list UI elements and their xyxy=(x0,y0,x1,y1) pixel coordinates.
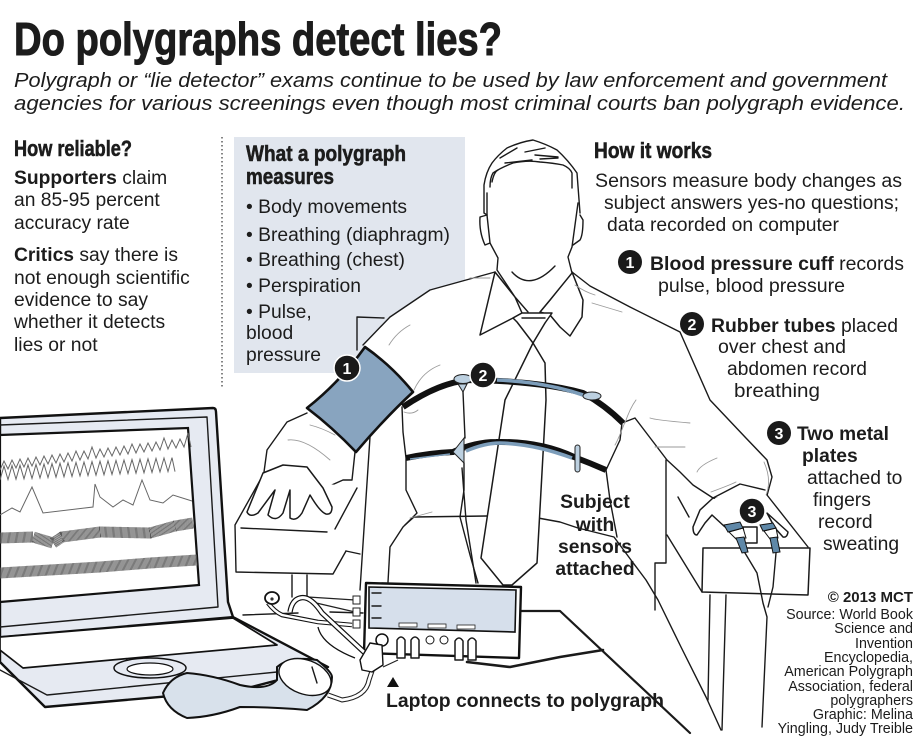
polygraph device xyxy=(364,583,521,660)
left hand and armrest xyxy=(235,465,360,597)
right arm rest and hand xyxy=(655,460,810,730)
credits and source: Graphic: Melina xyxy=(813,707,913,723)
intro text: Polygraph or “lie detector” exams continue to be used by law enforcement and government xyxy=(14,69,888,92)
rubber tube sensors xyxy=(403,374,623,583)
collar xyxy=(480,272,522,335)
credits and source xyxy=(778,589,914,737)
panel: what a polygraph measures: • Pulse, xyxy=(246,302,312,323)
laptop screen xyxy=(0,428,199,602)
marker 3: 3 xyxy=(748,504,757,521)
person illustration xyxy=(363,140,772,730)
panel: how reliable: lies or not xyxy=(14,335,98,356)
label: subject with sensors attached: attached xyxy=(555,559,635,580)
marker 3 xyxy=(739,498,765,524)
credits and source: Source: World Book xyxy=(786,607,914,623)
shirt torso and arms xyxy=(363,272,771,600)
blood pressure tubes xyxy=(265,592,398,700)
label: subject with sensors attached: sensors xyxy=(558,537,632,558)
credits and source: Science and xyxy=(834,621,913,637)
panel: how reliable: accuracy rate xyxy=(14,213,130,234)
trackpad area xyxy=(0,618,277,668)
step 3: plates xyxy=(802,446,858,467)
panel: how reliable xyxy=(13,136,190,356)
step 2: 2 xyxy=(688,317,697,334)
marker 2 xyxy=(470,362,496,388)
step 2 xyxy=(680,312,898,402)
credits and source: © 2013 MCT xyxy=(828,589,913,606)
step 1: Blood pressure cuff records xyxy=(650,254,904,275)
panel: how reliable: an 85-95 percent xyxy=(14,190,160,211)
panel: how it works: subject answers yes-no questions; xyxy=(604,193,899,214)
credits and source: Association, federal xyxy=(788,679,913,695)
marker 2: 2 xyxy=(479,368,488,385)
blood pressure cuff xyxy=(263,347,413,488)
panel: how reliable: How reliable? xyxy=(14,136,132,161)
credits and source: Yingling, Judy Treible xyxy=(778,721,913,737)
step 3: attached to xyxy=(807,468,902,489)
panel: how it works: data recorded on computer xyxy=(607,215,840,236)
chart: polygraph traces on screen xyxy=(0,433,197,573)
step 3: record xyxy=(818,512,873,533)
laptop xyxy=(0,408,328,707)
intro text xyxy=(14,69,905,115)
tie xyxy=(481,343,546,585)
panel: what a polygraph measures: blood xyxy=(246,323,293,344)
credits and source: Invention xyxy=(855,636,913,652)
credits and source: American Polygraph xyxy=(784,664,913,680)
step 2: over chest and xyxy=(718,337,846,358)
panel: what a polygraph measures: • Breathing (chest) xyxy=(246,250,405,271)
chair back left xyxy=(357,317,384,590)
label: laptop connects to polygraph xyxy=(386,677,664,712)
step 1 xyxy=(618,250,904,297)
panel: how it works: How it works xyxy=(594,138,712,163)
title: Do polygraphs detect lies? xyxy=(14,13,502,65)
step 1: 1 xyxy=(626,255,635,272)
step 3: Two metal xyxy=(797,424,889,445)
label: subject with sensors attached xyxy=(555,492,635,580)
step 2: Rubber tubes placed xyxy=(711,316,898,337)
step 2: breathing xyxy=(734,381,820,402)
marker 1: 1 xyxy=(343,361,352,378)
step 3 xyxy=(767,421,902,555)
step 3: 3 xyxy=(775,426,784,443)
step 3: sweating xyxy=(823,534,899,555)
panel: what a polygraph measures: • Perspiration xyxy=(246,276,361,297)
label: subject with sensors attached: with xyxy=(575,515,614,536)
panel: how reliable: not enough scientific xyxy=(14,268,190,289)
step 2: abdomen record xyxy=(727,359,867,380)
panel: how it works: Sensors measure body changes as xyxy=(595,171,902,192)
panel: what a polygraph measures: • Body movements xyxy=(246,197,407,218)
panel: what a polygraph measures: pressure xyxy=(246,345,321,366)
pressure bulb xyxy=(163,652,336,718)
panel: how reliable: Supporters claim xyxy=(14,168,167,189)
marker 1 xyxy=(334,355,360,381)
step 3: fingers xyxy=(813,490,871,511)
shirt creases xyxy=(389,278,736,518)
panel: what a polygraph measures xyxy=(234,137,465,373)
panel: how reliable: Critics say there is xyxy=(14,245,178,266)
intro text: agencies for various screenings even though most criminal courts ban polygraph evidence. xyxy=(14,92,905,115)
credits and source: polygraphers xyxy=(830,693,913,709)
panel: what a polygraph measures: What a polygraph xyxy=(246,141,406,166)
panel: how reliable: evidence to say xyxy=(14,290,148,311)
panel: what a polygraph measures: • Breathing (diaphragm) xyxy=(246,225,450,246)
panel: how it works xyxy=(594,138,904,555)
label: subject with sensors attached: Subject xyxy=(560,492,630,513)
label: laptop connects to polygraph: Laptop connects to polygraph xyxy=(386,691,664,712)
credits and source: Encyclopedia, xyxy=(824,650,913,666)
panel: how reliable: whether it detects xyxy=(13,312,165,333)
desk xyxy=(243,611,690,733)
panel: what a polygraph measures: measures xyxy=(246,164,334,189)
head xyxy=(480,140,583,312)
step 1: pulse, blood pressure xyxy=(658,276,845,297)
